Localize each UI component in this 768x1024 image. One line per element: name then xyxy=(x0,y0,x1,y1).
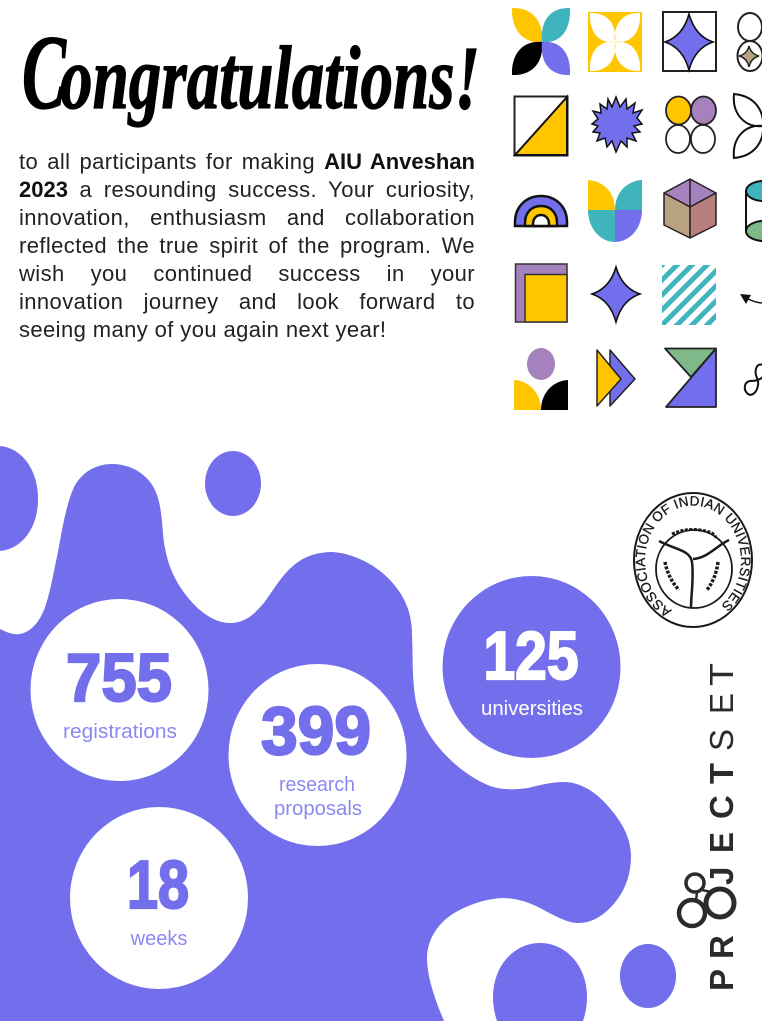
stat: 18 weeks: 18 xyxy=(127,847,189,923)
icon: rainbow arch xyxy=(515,196,567,226)
text block: congratulations message: seeing many of you again next year! xyxy=(19,317,386,342)
panel: icon grid xyxy=(512,8,768,410)
icon: outlined leaves xyxy=(734,94,763,158)
icon: cylinder xyxy=(745,180,762,242)
icon: nested squares xyxy=(516,264,567,322)
icon: curved arrow xyxy=(740,294,763,304)
logo mark: linked circles xyxy=(679,874,734,926)
stat: 399 research proposals: 399 xyxy=(261,693,371,769)
icon: striped teal square xyxy=(662,265,716,325)
blob: bottom right xyxy=(620,944,676,1008)
blob: small top xyxy=(205,451,261,516)
icon: star in square xyxy=(663,12,716,71)
stat: 125 universities: universities xyxy=(481,698,583,720)
text block: congratulations message: wish you continued success in your xyxy=(19,261,475,286)
logo: ProjectSet wordmark: E xyxy=(703,693,740,714)
logo: ProjectSet wordmark: C xyxy=(703,795,740,819)
logo: ProjectSet wordmark: P xyxy=(703,969,740,991)
text block: congratulations message: innovation, enthusiasm and collaboration xyxy=(19,205,475,230)
text block: congratulations message xyxy=(19,149,475,342)
icon: half yellow square xyxy=(514,96,568,156)
panel: purple blob background xyxy=(0,446,676,1021)
text block: congratulations message: innovation journey and look forward to xyxy=(19,289,475,314)
stat: 18 weeks xyxy=(70,807,248,989)
stat: 755 registrations: registrations xyxy=(63,721,177,743)
stat: 399 research proposals xyxy=(228,664,406,846)
icon: double chevron triangles xyxy=(597,350,635,406)
title: C xyxy=(22,14,67,131)
logo: ProjectSet wordmark: E xyxy=(703,832,740,853)
logo: ProjectSet wordmark xyxy=(679,663,740,991)
logo: ProjectSet wordmark: T xyxy=(703,663,740,686)
icon: four point star xyxy=(592,267,640,322)
text block: congratulations message: 2023 a resounding success. Your curiosity, xyxy=(19,177,475,202)
icon: yellow square with white petals xyxy=(588,12,642,72)
logo: Association of Indian Universities seal: ASSOCIATION OF INDIAN UNIVERSITIES xyxy=(636,496,751,616)
logo: ProjectSet wordmark: J xyxy=(703,867,740,885)
icon: circles with tan diamond xyxy=(738,13,762,71)
stat: 399 research proposals: proposals xyxy=(274,798,362,820)
text block: congratulations message: to all participants for making AIU Anveshan xyxy=(19,149,475,174)
icon: four petals xyxy=(512,8,570,75)
icon: green and purple triangles xyxy=(665,348,716,407)
stat: 399 research proposals: research xyxy=(279,774,355,796)
icon: cube xyxy=(664,179,716,238)
logo: ProjectSet wordmark: R xyxy=(703,935,740,959)
stat: 18 weeks: weeks xyxy=(130,928,187,950)
logo: ProjectSet wordmark: T xyxy=(703,763,740,784)
icon: purple starburst xyxy=(592,97,642,152)
main blob xyxy=(0,464,631,1021)
title: ongratulations! xyxy=(60,29,480,128)
stat: 755 registrations: 755 xyxy=(66,640,172,716)
icon: squiggle xyxy=(745,364,764,395)
icon: person shape xyxy=(514,348,568,410)
title xyxy=(22,14,480,131)
blob: bottom centre xyxy=(493,943,587,1021)
stat: 125 universities: 125 xyxy=(484,618,578,694)
stat: 125 universities xyxy=(442,576,620,758)
blob: top left xyxy=(0,446,38,551)
logo: ProjectSet wordmark: S xyxy=(703,729,740,751)
stat: 755 registrations xyxy=(30,599,208,781)
text block: congratulations message: reflected the true spirit of the program. We xyxy=(19,233,475,258)
icon: four circles xyxy=(666,96,716,153)
icon: color block tulip xyxy=(588,180,642,242)
